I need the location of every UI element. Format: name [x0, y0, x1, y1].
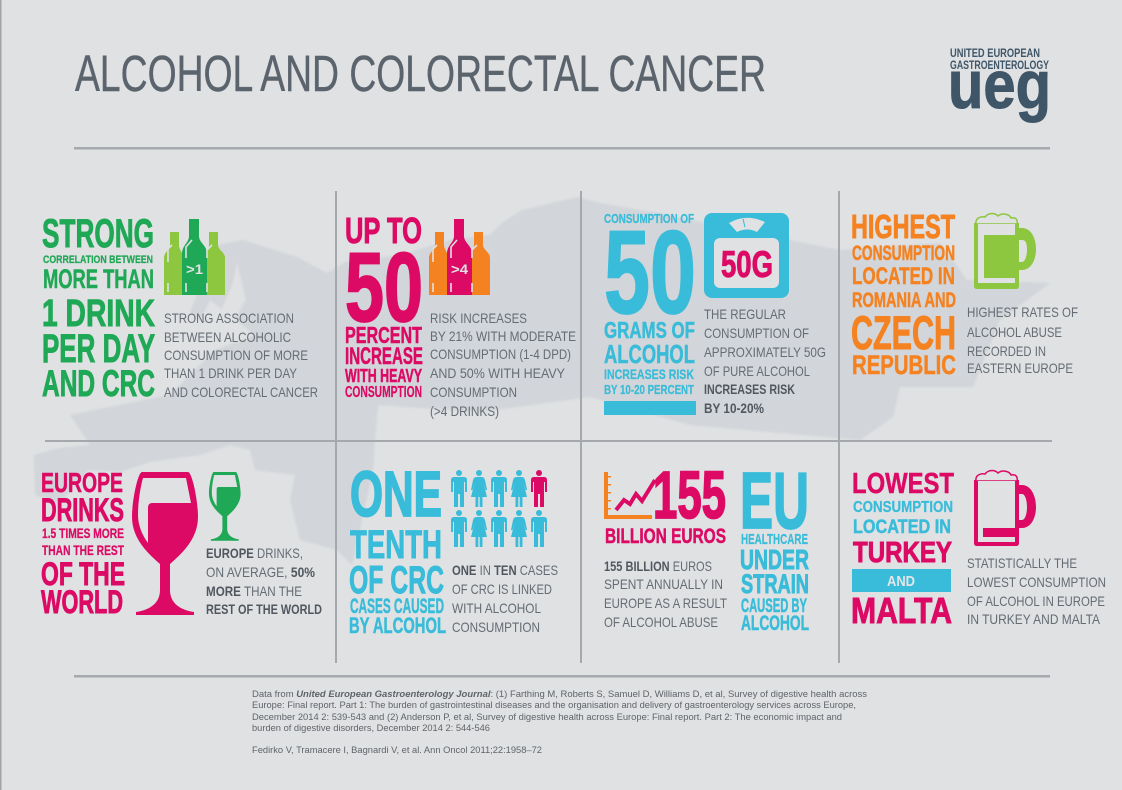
heading: strong correlation: PER DAY: [42, 327, 155, 371]
heading: Europe drinks: 1.5 TIMES MORE: [42, 525, 124, 541]
text block: AND COLORECTAL CANCER: [164, 384, 318, 400]
heading: strong correlation: CORRELATION BETWEEN: [43, 254, 153, 266]
heading: up to 50 percent: UP TO: [345, 210, 422, 251]
heading: lowest consumption: LOCATED IN: [853, 516, 951, 538]
text block: MORE THAN THE: [206, 583, 302, 599]
heading: one tenth: CASES CAUSED: [350, 595, 444, 618]
panel: lowest consumption: [851, 468, 1106, 631]
heading: highest consumption: [851, 208, 956, 380]
heading: 50 grams of alcohol: CONSUMPTION OF: [604, 211, 694, 226]
text block: OF PURE ALCOHOL: [704, 363, 810, 379]
heading: one tenth: ONE: [350, 458, 442, 530]
heading: Europe drinks: OF THE: [41, 556, 125, 592]
text block: REST OF THE WORLD: [206, 601, 322, 617]
heading: 155 billion euros: BILLION EUROS: [605, 525, 726, 548]
panel: one tenth of CRC: [349, 458, 558, 638]
icon: rising line chart: [604, 472, 655, 519]
text block: [164, 310, 318, 400]
text block: STATISTICALLY THE: [967, 555, 1077, 571]
heading: one tenth: OF CRC: [349, 559, 444, 602]
icon: ten people: [451, 470, 547, 547]
heading: highest consumption: CONSUMPTION: [852, 242, 955, 265]
heading: 50 grams of alcohol: 50: [604, 207, 696, 339]
icon: bottles >1: >1: [186, 261, 203, 277]
text block: (>4 DRINKS): [430, 403, 499, 419]
text block: OF CRC IS LINKED: [452, 581, 552, 597]
text block: [967, 304, 1078, 376]
heading: lowest consumption: CONSUMPTION: [853, 499, 953, 516]
icon: green beer mug: [974, 214, 1036, 289]
heading: highest consumption: HIGHEST: [851, 208, 955, 245]
heading: highest consumption: CZECH: [851, 306, 956, 359]
text block: CONSUMPTION OF: [704, 325, 809, 341]
footnote: sources: December 2014 2: 539-543 and (2) Anderson P, et al, Survey of digestive health across Europe: Final report. Part 2: The economic impact and: [252, 712, 842, 722]
text block: CONSUMPTION (1-4 DPD): [430, 346, 571, 362]
footnote: sources: [252, 689, 868, 755]
footnote: sources: Europe: Final report. Part 1: The burden of gastrointestinal diseases and the organisation and delivery of gastroenterology services across Europe,: [252, 700, 856, 710]
footnote: sources: Fedirko V, Tramacere I, Bagnardi V, et al. Ann Oncol 2011;22:1958–72: [252, 745, 542, 755]
UEG logo: GASTROENTEROLOGY: [950, 60, 1049, 72]
heading: up to 50 percent: PERCENT: [345, 322, 422, 348]
panel: up to 50 percent: [345, 210, 576, 419]
text block: IN TURKEY AND MALTA: [967, 611, 1101, 627]
heading: one tenth: BY ALCOHOL: [349, 613, 446, 638]
icon: pink empty mug: [974, 470, 1036, 546]
heading: EU healthcare under strain: UNDER: [740, 544, 809, 575]
heading: 155 billion euros: 155: [653, 458, 726, 533]
icon: bottles >1: [164, 219, 225, 295]
heading: up to 50 percent: INCREASE: [345, 343, 423, 370]
title: ALCOHOL AND COLORECTAL CANCER: [75, 45, 766, 102]
text block: ON AVERAGE, 50%: [206, 564, 315, 580]
heading: 50 grams of alcohol: ALCOHOL: [604, 339, 695, 369]
panel: 155 billion euros: [604, 456, 809, 635]
icon: bottles >4: >4: [451, 261, 468, 277]
text block: WITH ALCOHOL: [452, 600, 541, 616]
heading: 50 grams of alcohol: INCREASES RISK: [604, 366, 694, 382]
heading: highest consumption: LOCATED IN: [852, 263, 955, 290]
heading: lowest consumption: MALTA: [851, 590, 952, 631]
panel: strong correlation: [42, 212, 318, 404]
heading: lowest consumption: [851, 468, 954, 631]
heading: lowest consumption: LOWEST: [852, 468, 954, 500]
text block: EASTERN EUROPE: [967, 360, 1073, 376]
heading: up to 50 percent: 50: [345, 232, 423, 342]
heading: EU healthcare under strain: STRAIN: [741, 569, 809, 599]
text block: [704, 306, 826, 416]
panel: Europe drinks: [41, 467, 322, 620]
icon: weighing scale 50G: [704, 213, 789, 298]
text block: [604, 558, 727, 630]
UEG logo: ueg: [948, 47, 1051, 123]
text block: APPROXIMATELY 50G: [704, 344, 826, 360]
heading: highest consumption: REPUBLIC: [852, 350, 956, 380]
text block: CONSUMPTION: [430, 384, 517, 400]
text block: AND 50% WITH HEAVY: [430, 365, 566, 381]
icon: bottles >4: [429, 219, 490, 295]
heading: 50 grams of alcohol: GRAMS OF: [604, 317, 695, 343]
heading: EU healthcare under strain: ALCOHOL: [741, 612, 809, 635]
heading: up to 50 percent: CONSUMPTION: [345, 384, 422, 401]
heading: Europe drinks: WORLD: [41, 584, 123, 620]
heading: lowest consumption: AND: [887, 573, 915, 590]
heading: one tenth: [349, 458, 446, 638]
text block: HIGHEST RATES OF: [967, 304, 1078, 320]
heading: one tenth: TENTH: [350, 523, 442, 567]
heading: EU healthcare under strain: CAUSED BY: [741, 596, 807, 617]
text block: ONE IN TEN CASES: [452, 562, 558, 578]
footnote: sources: Data from United European Gastroenterology Journal : (1) Farthing M, Roberts S, Samuel D, Williams D, et al, Survey of digestive health across: [252, 689, 868, 699]
text block: [452, 562, 558, 635]
text block: [206, 545, 322, 617]
background map of Europe: [34, 197, 1050, 565]
text block: OF ALCOHOL ABUSE: [604, 614, 718, 630]
heading: Europe drinks: EUROPE: [41, 467, 123, 498]
heading: 155 billion euros: [605, 458, 726, 548]
text block: BY 10-20%: [704, 400, 764, 416]
icon: large wine glass: [132, 472, 198, 615]
heading: up to 50 percent: [345, 210, 423, 401]
heading: strong correlation: MORE THAN: [43, 264, 154, 294]
heading: up to 50 percent: WITH HEAVY: [345, 366, 422, 386]
text block: BETWEEN ALCOHOLIC: [164, 329, 291, 345]
heading: Europe drinks: [41, 467, 125, 620]
text block: CONSUMPTION OF MORE: [164, 347, 308, 363]
heading: strong correlation: STRONG: [42, 212, 154, 256]
text block: STRONG ASSOCIATION: [164, 310, 294, 326]
text block: [430, 310, 576, 419]
icon: small green wine glass: [209, 472, 241, 541]
text block: [967, 555, 1106, 627]
UEG logo: UNITED EUROPEAN: [950, 48, 1040, 60]
heading: Europe drinks: DRINKS: [41, 492, 124, 528]
text block: RISK INCREASES: [430, 310, 527, 326]
heading: strong correlation: [42, 212, 155, 404]
text block: BY 21% WITH MODERATE: [430, 328, 576, 344]
text block: EUROPE AS A RESULT: [604, 595, 727, 611]
heading: highest consumption: ROMANIA AND: [852, 289, 956, 312]
text block: RECORDED IN: [967, 343, 1046, 359]
heading: Europe drinks: THAN THE REST: [42, 542, 124, 558]
heading: EU healthcare under strain: EU: [740, 456, 809, 545]
text block: INCREASES RISK: [704, 381, 795, 397]
panel: consumption of 50 grams: [604, 207, 826, 416]
heading: 50 grams of alcohol: BY 10-20 PERCENT: [604, 382, 694, 397]
heading: EU healthcare under strain: HEALTHCARE: [741, 531, 808, 548]
text block: CONSUMPTION: [452, 619, 540, 635]
heading: lowest consumption: TURKEY: [853, 537, 952, 569]
text block: THAN 1 DRINK PER DAY: [164, 365, 298, 381]
footnote: sources: burden of digestive disorders, December 2014 2: 544-546: [252, 723, 490, 733]
panel: highest consumption: [851, 208, 1078, 380]
text block: EUROPE DRINKS,: [206, 545, 303, 561]
text block: THE REGULAR: [704, 306, 786, 322]
heading: 50 grams of alcohol: [604, 207, 696, 415]
text block: SPENT ANNUALLY IN: [604, 576, 723, 592]
heading: strong correlation: AND CRC: [42, 363, 155, 404]
text block: 155 BILLION EUROS: [604, 558, 712, 574]
heading: strong correlation: 1 DRINK: [42, 293, 155, 335]
heading: EU healthcare under strain: [740, 456, 809, 635]
icon: weighing scale 50G: 50G: [721, 244, 773, 285]
text block: ALCOHOL ABUSE: [967, 324, 1062, 340]
